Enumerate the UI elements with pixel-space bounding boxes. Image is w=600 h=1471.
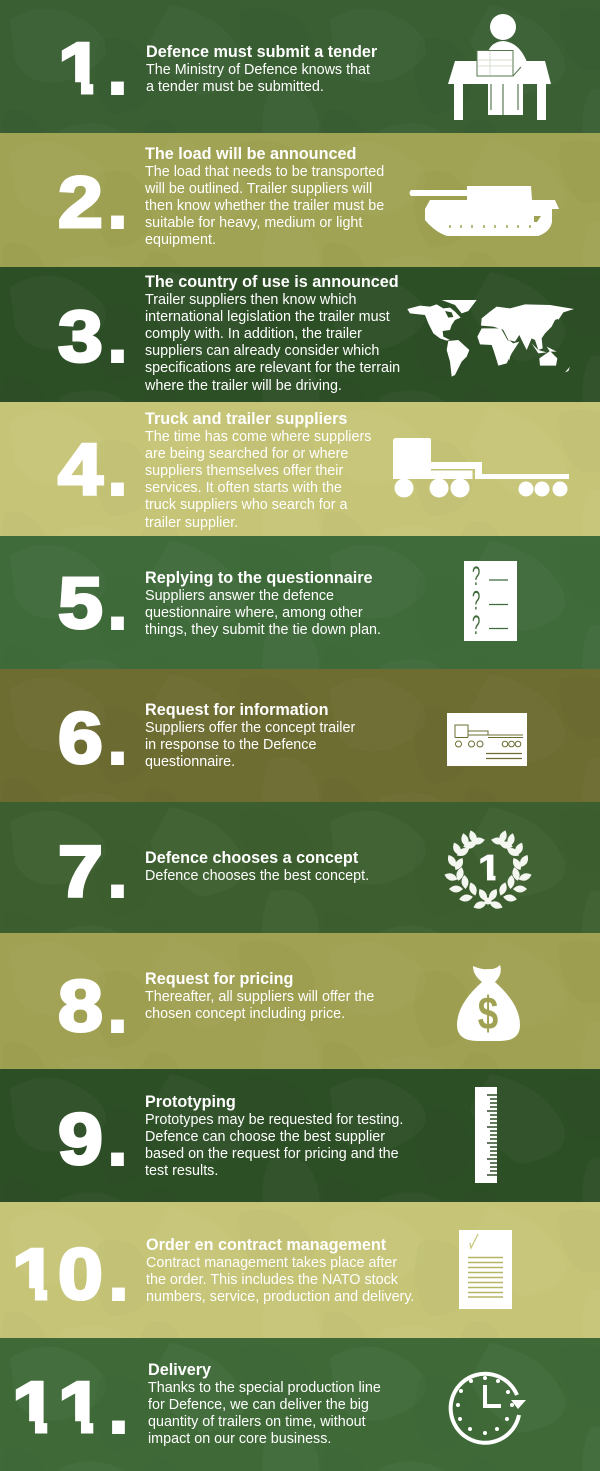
text block 2: The load that needs to be transported [145,164,384,180]
band 4: suppliers [0,402,600,536]
text block 11: Delivery [148,1361,211,1379]
text block 10: Contract management takes place after [146,1255,397,1271]
number 3: 3 [58,297,103,377]
band 11: delivery [0,1338,600,1471]
text block 4 [145,410,371,531]
text block 8 [145,970,374,1022]
icon: clock with arrow [448,1372,526,1445]
text block 9: Defence can choose the best supplier [145,1129,385,1145]
text block 5 [145,569,381,638]
text block 5: Replying to the questionnaire [145,569,373,587]
text block 4: services. It often starts with the [145,480,342,496]
text block 4: are being searched for or where [145,446,348,462]
number 5: . [105,550,130,650]
icon: money bag: $ [478,987,498,1039]
text block 9 [145,1093,403,1179]
number 9 [58,1086,130,1186]
band 8: request for pricing [0,933,600,1069]
number 5: 5 [58,564,103,644]
text block 2: will be outlined. Trailer suppliers will [145,181,372,197]
text block 8: Request for pricing [145,970,293,988]
text block 6: Request for information [145,701,328,719]
icon: concept trailer card [447,713,527,766]
number 4: 4 [58,430,103,510]
text block 1: The Ministry of Defence knows that [146,62,370,78]
number 8 [58,952,130,1052]
icon: questionnaire sheet [464,560,517,641]
icon: contract document [459,1230,512,1309]
text block 3: comply with. In addition, the trailer [145,326,362,342]
text block 11 [148,1361,381,1447]
number 9: 9 [58,1100,103,1180]
number 7: 7 [58,832,103,912]
band 9: prototyping [0,1069,600,1202]
text block 5: things, they submit the tie down plan. [145,622,381,638]
text block 7 [145,849,369,884]
text block 2: suitable for heavy, medium or light [145,215,362,231]
band 6: request for information [0,669,600,802]
band 7: chooses a concept [60,830,532,909]
band 2: load [0,133,600,267]
text block 9: based on the request for pricing and the [145,1146,399,1162]
text block 3 [145,273,400,394]
number 7 [58,818,130,918]
icon: tank [410,186,559,236]
text block 11: for Defence, we can deliver the big [148,1397,369,1413]
number 10: 0 [58,1235,103,1315]
number 2: . [105,148,130,248]
text block 3: suppliers can already consider which [145,343,379,359]
text block 4: trailer supplier. [145,515,238,531]
text block 11: Thanks to the special production line [148,1380,381,1396]
icon: questionnaire sheet: ? [472,585,480,616]
text block 4: The time has come where suppliers [145,429,371,445]
band 5: questionnaire [0,536,600,669]
icon: questionnaire sheet: ? [472,609,480,640]
number 11: 1 [12,1368,57,1448]
icon: person at desk with laptop [448,14,551,120]
number 4: . [105,416,130,516]
number 1: . [105,14,130,114]
text block 3: Trailer suppliers then know which [145,292,357,308]
number 9: . [105,1086,130,1186]
band 1: tender [62,14,551,120]
text block 3: specifications are relevant for the terrain [145,360,400,376]
number 10 [16,1220,131,1320]
band 10: contract management [0,1202,600,1338]
number 7: . [105,818,130,918]
text block 9: Prototypes may be requested for testing. [145,1112,403,1128]
text block 11: impact on our core business. [148,1431,331,1447]
icon: ruler [475,1087,497,1183]
text block 9: Prototyping [145,1093,236,1111]
icon: money bag [457,965,520,1041]
text block 6: Suppliers offer the concept trailer [145,720,355,736]
text block 8: Thereafter, all suppliers will offer the [145,989,374,1005]
text block 11: quantity of trailers on time, without [148,1414,366,1430]
text block 3: The country of use is announced [145,273,399,291]
number 1 [62,14,130,114]
number 10: . [106,1220,131,1320]
text block 10: Order en contract management [146,1236,386,1254]
icon: questionnaire sheet: ? [472,560,480,591]
text block 8: chosen concept including price. [145,1006,345,1022]
icon: truck and trailer [393,438,569,498]
text block 1: a tender must be submitted. [146,79,324,95]
number 11: 1 [58,1368,103,1448]
text block 3: where the trailer will be driving. [145,378,342,394]
number 2: 2 [58,163,103,243]
number 4 [58,416,130,516]
number 10: 1 [12,1235,57,1315]
text block 2: then know whether the trailer must be [145,198,384,214]
text block 2: equipment. [145,232,216,248]
text block 6: questionnaire. [145,754,235,770]
number 8: 8 [58,967,103,1047]
number 11 [16,1354,131,1454]
text block 2 [145,145,384,248]
text block 1: Defence must submit a tender [146,43,377,61]
number 11: . [106,1354,131,1454]
text block 4: suppliers themselves offer their [145,463,343,479]
text block 5: questionnaire where, among other [145,605,363,621]
number 1: 1 [58,29,103,109]
text block 6 [145,701,356,770]
icon: laurel wreath with number one [444,830,532,909]
text block 4: truck suppliers who search for a [145,497,348,513]
number 5 [58,550,130,650]
number 6: . [105,684,130,784]
text block 10: numbers, service, production and delivery. [146,1289,414,1305]
number 2 [58,148,130,248]
text block 6: in response to the Defence [145,737,316,753]
number 6 [58,684,130,784]
number 3 [58,282,130,382]
text block 3: international legislation the trailer must [145,309,390,325]
text block 7: Defence chooses a concept [145,849,358,867]
number 8: . [105,952,130,1052]
text block 10 [146,1236,414,1305]
band 3: country [0,267,600,402]
text block 2: The load will be announced [145,145,356,163]
text block 4: Truck and trailer suppliers [145,410,347,428]
text block 10: the order. This includes the NATO stock [146,1272,398,1288]
number 3: . [105,282,130,382]
text block 9: test results. [145,1163,218,1179]
text block 1 [146,43,377,95]
number 6: 6 [58,699,103,779]
icon: laurel wreath with number one: 1 [478,848,500,888]
icon: world map [407,300,574,377]
text block 5: Suppliers answer the defence [145,588,334,604]
text block 7: Defence chooses the best concept. [145,868,369,884]
